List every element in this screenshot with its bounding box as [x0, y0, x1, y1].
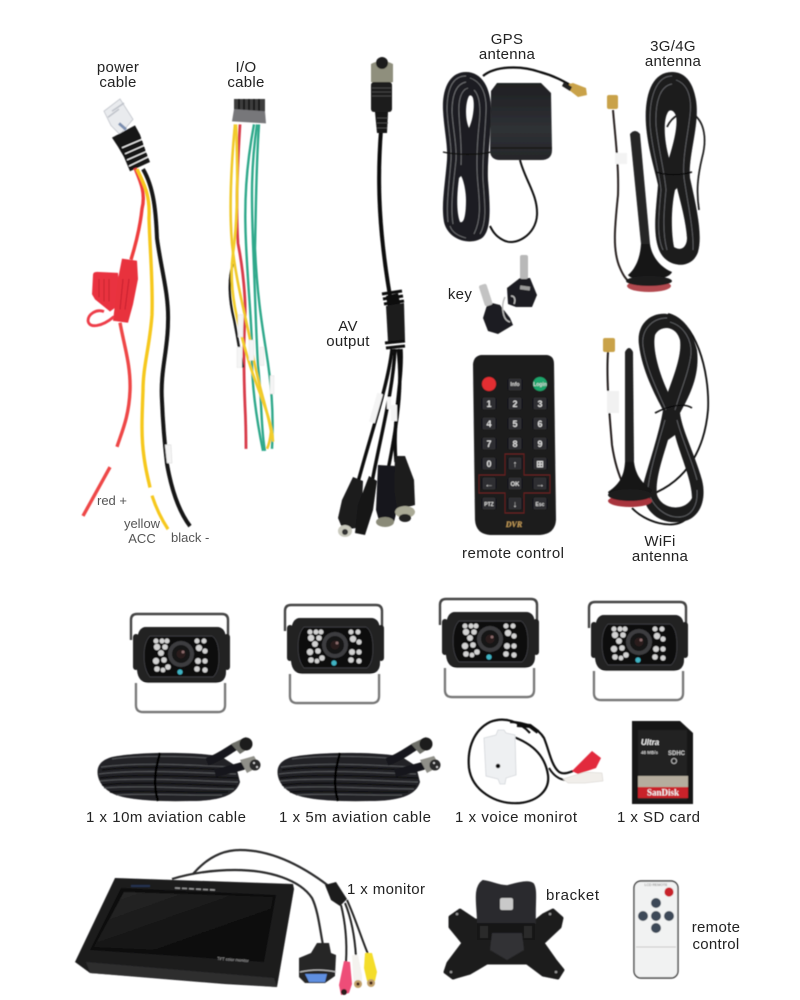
- label: WiFi antenna: antenna: [632, 548, 689, 565]
- remote control (DVR): →: [536, 479, 544, 489]
- SD card: 48 MB/s: [641, 750, 659, 755]
- label: power cable: power: [97, 59, 139, 76]
- label: small remote control: control: [692, 936, 740, 953]
- key: [478, 255, 537, 334]
- AV output cable: [338, 57, 415, 537]
- label: 10m aviation cable: 1 x 10m aviation cable: [86, 809, 246, 826]
- label: black -: black -: [171, 530, 209, 545]
- remote control (DVR): Login: [533, 382, 547, 388]
- SD card: [632, 721, 693, 804]
- camera 2: [285, 605, 384, 703]
- camera 3: [440, 599, 539, 697]
- label: bracket: bracket: [546, 887, 600, 904]
- label: 3G/4G antenna: 3G/4G: [650, 38, 696, 55]
- remote control (DVR): 6: [537, 419, 543, 429]
- 10m aviation cable: [98, 737, 260, 801]
- label: remote control: remote control: [462, 545, 564, 562]
- remote control (DVR): 3: [537, 399, 543, 409]
- power cable: [83, 99, 190, 529]
- remote control (DVR): Esc: [536, 502, 545, 508]
- 3G/4G antenna: [607, 72, 705, 292]
- remote control (DVR): [473, 355, 556, 535]
- label: key: key: [448, 286, 472, 303]
- label: voice monitor: 1 x voice monirot: [455, 809, 578, 826]
- SD card: SDHC: [668, 751, 686, 757]
- remote control (DVR): 8: [512, 439, 518, 449]
- remote control (DVR): ←: [484, 479, 494, 489]
- remote control (DVR): 2: [512, 399, 518, 409]
- label: I/O cable: cable: [227, 74, 265, 91]
- remote control (DVR): ⊞: [536, 459, 544, 469]
- label: red +: red +: [97, 493, 127, 508]
- label: 3G/4G antenna: antenna: [645, 53, 702, 70]
- remote control (DVR): OK: [510, 482, 520, 488]
- WiFi antenna: [603, 314, 708, 524]
- label: I/O cable: I/O: [236, 59, 256, 76]
- label: GPS antenna: GPS: [491, 31, 523, 48]
- label: power cable: cable: [99, 74, 137, 91]
- remote control (DVR): 7: [486, 439, 492, 449]
- label: AV output: AV: [338, 318, 358, 335]
- 5m aviation cable: [278, 737, 440, 801]
- monitor: TFT color monitor: [217, 956, 250, 963]
- SD card: SanDisk: [647, 788, 679, 798]
- remote control (DVR): 9: [537, 439, 543, 449]
- voice monitor: [469, 720, 603, 803]
- remote control (DVR): 0: [486, 459, 492, 469]
- remote control (DVR): ↑: [513, 459, 517, 469]
- bracket: [445, 881, 563, 978]
- small remote control: LCD REMOTE: [645, 883, 668, 887]
- remote control (DVR): PTZ: [484, 502, 494, 508]
- I/O cable: [230, 99, 274, 451]
- camera 4: [589, 602, 688, 700]
- label: yellow ACC: yellow: [124, 516, 160, 531]
- monitor: [75, 850, 377, 995]
- remote control (DVR): Info: [510, 382, 520, 388]
- label: small remote control: remote: [692, 919, 740, 936]
- remote control (DVR): DVR: [505, 520, 523, 529]
- remote control (DVR): 4: [486, 419, 492, 429]
- remote control (DVR): 5: [512, 419, 518, 429]
- label: SD card: 1 x SD card: [617, 809, 700, 826]
- remote control (DVR): 1: [486, 399, 492, 409]
- label: GPS antenna: antenna: [479, 46, 536, 63]
- SD card: Ultra: [641, 738, 660, 747]
- label: 5m aviation cable: 1 x 5m aviation cable: [279, 809, 431, 826]
- small remote control: [634, 881, 678, 978]
- label: WiFi antenna: WiFi: [644, 533, 676, 550]
- remote control (DVR): ↓: [513, 499, 517, 509]
- label: monitor: 1 x monitor: [347, 881, 425, 898]
- GPS antenna: [443, 67, 587, 242]
- camera 1: [131, 614, 230, 712]
- label: AV output: output: [326, 333, 370, 350]
- label: yellow ACC: ACC: [128, 531, 156, 546]
